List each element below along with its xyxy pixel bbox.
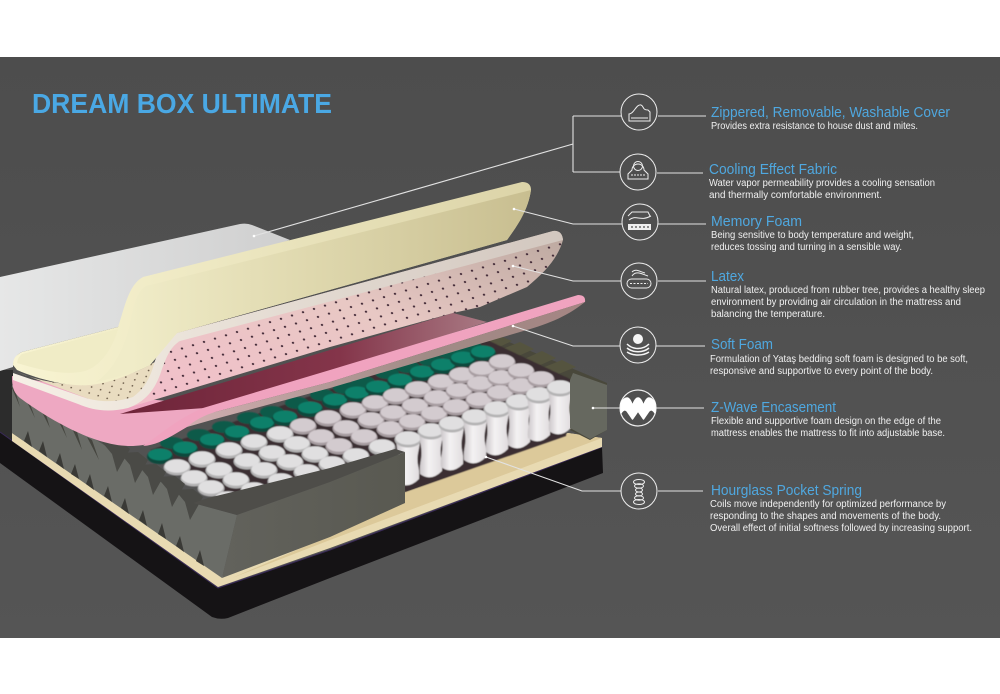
text block: latex: Natural latex, produced from rubber tree, provides a healthy sleep: [711, 285, 986, 296]
left wave encasement: [11, 385, 237, 578]
front foam block: [193, 449, 405, 578]
text block: latex: environment by providing air circulation in the mattress and: [711, 297, 961, 308]
text block: soft foam: Soft Foam: [711, 336, 773, 353]
text block: z-wave: mattress enables the mattress to fit into adjustable base.: [711, 428, 945, 439]
text block: pocket spring: Coils move independently for optimized performance by: [710, 499, 946, 510]
text block: soft foam: [710, 336, 968, 377]
tall front springs: [394, 380, 574, 485]
text block: z-wave: [711, 399, 945, 439]
green spring row: [147, 346, 496, 464]
right end encasement block: [570, 373, 607, 439]
text block: latex: Latex: [711, 268, 744, 285]
pocket spring core: [147, 338, 574, 512]
text block: pocket spring: [710, 482, 972, 534]
text block: memory foam: [711, 213, 914, 253]
text block: latex: balancing the temperature.: [711, 309, 825, 320]
text block: cooling: [709, 161, 935, 201]
text block: memory foam: reduces tossing and turning in a sensible way.: [711, 242, 902, 253]
white spring rows: [164, 354, 554, 508]
icon: zippered cover: [621, 94, 657, 130]
text block: z-wave: Flexible and supportive foam design on the edge of the: [711, 416, 942, 427]
mattress illustration: [0, 94, 706, 619]
icon: z-wave: [620, 390, 656, 426]
text block: pocket spring: responding to the shapes and movements of the body.: [710, 511, 941, 522]
text block: cooling: Cooling Effect Fabric: [709, 161, 837, 178]
text block: cover: Provides extra resistance to house dust and mites.: [711, 121, 918, 132]
text block: cooling: Water vapor permeability provides a cooling sensation: [709, 178, 935, 189]
back wall of encasement: [470, 335, 607, 440]
memory foam layer: [13, 182, 531, 385]
leader lines: [253, 116, 706, 491]
icon: cooling fabric: [620, 154, 656, 190]
text block: cover: Zippered, Removable, Washable Cover: [711, 104, 950, 121]
icon: soft foam: [620, 327, 656, 363]
back green row: [160, 341, 482, 449]
icon: latex: [621, 263, 657, 299]
text block: pocket spring: Overall effect of initial softness followed by increasing support.: [710, 523, 972, 534]
text block: cover: [711, 104, 950, 132]
text block: soft foam: responsive and supportive to every point of the body.: [710, 366, 933, 377]
icon: memory foam: [622, 204, 658, 240]
text block: cooling: and thermally comfortable environment.: [709, 190, 882, 201]
icon: pocket spring: [621, 473, 657, 509]
text block: pocket spring: Hourglass Pocket Spring: [711, 482, 862, 499]
text block: memory foam: Memory Foam: [711, 213, 802, 230]
text block: memory foam: Being sensitive to body temperature and weight,: [711, 230, 914, 241]
text block: soft foam: Formulation of Yataş bedding soft foam is designed to be soft,: [710, 354, 968, 365]
soft foam layer: [12, 295, 585, 446]
white zippered cover: [0, 224, 290, 371]
text block: z-wave: Z-Wave Encasement: [711, 399, 837, 416]
mattress base: [0, 370, 603, 619]
text block: latex: [711, 268, 986, 320]
title: DREAM BOX ULTIMATE: [32, 88, 332, 119]
latex layer: [13, 231, 563, 411]
